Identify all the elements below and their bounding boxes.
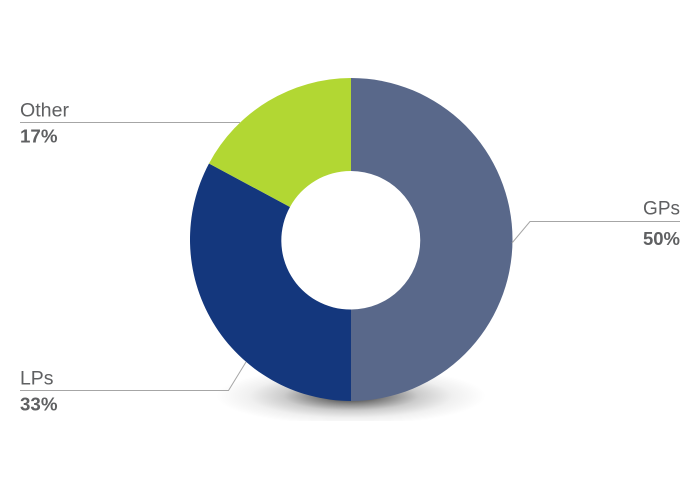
pie shadow [235,378,467,421]
label: GPs 50% [643,198,680,249]
label: LPs 33%: 33% [20,394,58,414]
leader line: Other [20,122,240,124]
label: LPs 33%: LPs [20,368,54,390]
leader line: GPs [512,222,680,243]
label: Other 17% [20,100,70,146]
label: Other 17%: 17% [20,126,58,146]
segment: Other 17% [209,78,351,207]
segment: LPs 33% [190,164,351,401]
label: Other 17%: Other [20,100,70,122]
label: GPs 50%: 50% [643,228,680,249]
leader line: LPs [20,362,246,390]
donut chart [190,78,512,401]
label: LPs 33% [20,368,58,414]
label: GPs 50%: GPs [643,198,680,220]
segment: GPs 50% [351,78,512,401]
